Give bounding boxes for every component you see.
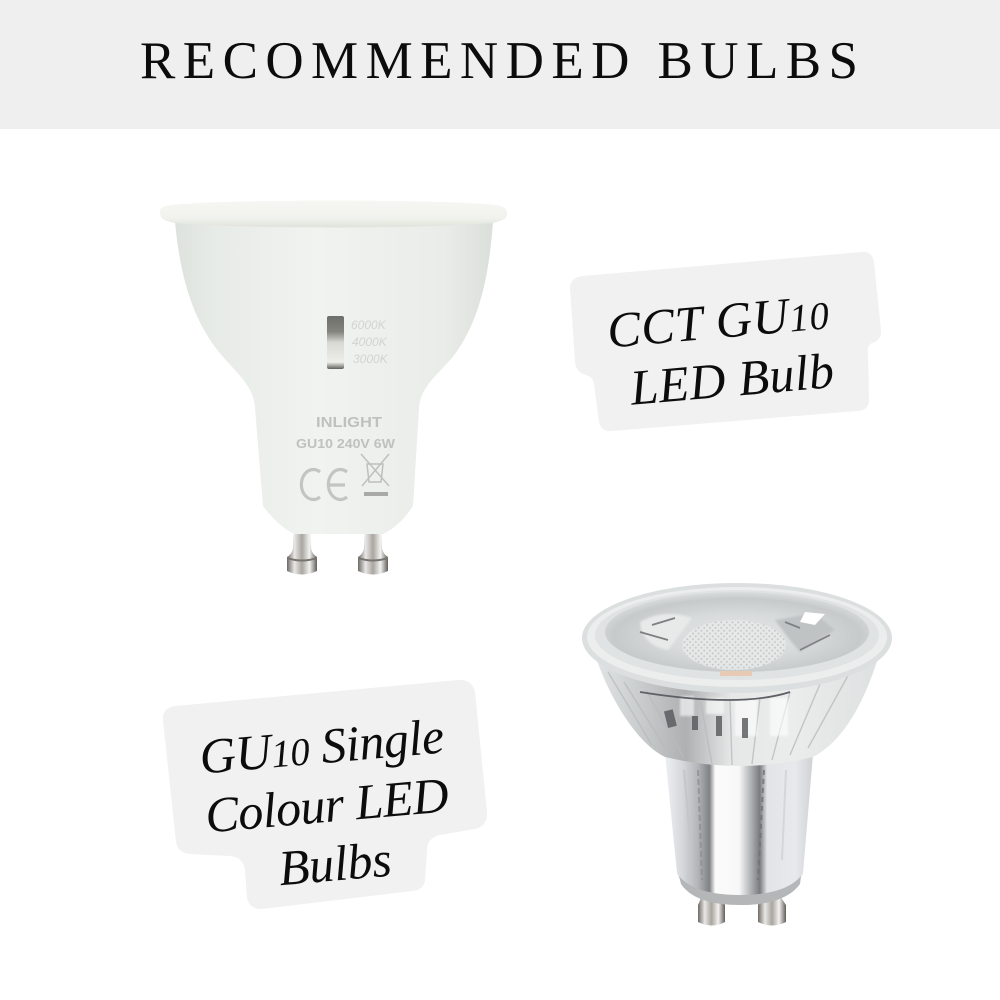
white CCT GU10 bulb [160, 200, 507, 574]
colour temperature labels [351, 318, 389, 366]
brand printing [296, 415, 395, 451]
header band with title [0, 0, 1000, 129]
label text: Bulbs [276, 831, 394, 896]
label: CCT GU10 LED Bulb [570, 252, 881, 431]
colour temperature switch [327, 316, 344, 369]
reflector chrome facets [680, 696, 788, 736]
neck streaks [684, 770, 786, 880]
bulb body [175, 222, 493, 534]
label text: Colour LED [203, 766, 451, 843]
glass bulb pins [698, 896, 786, 926]
colour temperature labels: 6000K [351, 318, 387, 332]
brand printing: INLIGHT [316, 415, 382, 431]
glass single colour GU10 bulb [582, 583, 892, 926]
label background [163, 680, 487, 909]
reflector inner scalloped edge [640, 692, 790, 700]
colour temperature labels: 4000K [352, 335, 388, 349]
glass bulb neck [665, 754, 813, 905]
bulb pins [287, 530, 388, 574]
CE mark [301, 470, 347, 500]
glass reflector cone [595, 655, 879, 766]
label text [605, 283, 836, 417]
label: GU10 Single Colour LED Bulbs [163, 680, 487, 909]
recycling bin symbol [361, 454, 389, 496]
colour temperature labels: 3000K [353, 352, 389, 366]
label text: CCT GU10 [605, 283, 831, 359]
LED chip [720, 671, 752, 676]
label text: GU10 Single [197, 708, 446, 785]
title: RECOMMENDED BULBS [140, 32, 858, 90]
label background [570, 252, 881, 431]
label text: LED Bulb [627, 342, 836, 416]
glass lens [605, 592, 869, 672]
lens highlights [640, 612, 835, 670]
glass lens rim [582, 583, 892, 693]
bulb rim [160, 200, 507, 228]
reflector dark facets [664, 709, 748, 738]
brand printing: GU10 240V 6W [296, 437, 395, 451]
label text [197, 708, 456, 902]
neck base ring [679, 876, 801, 905]
